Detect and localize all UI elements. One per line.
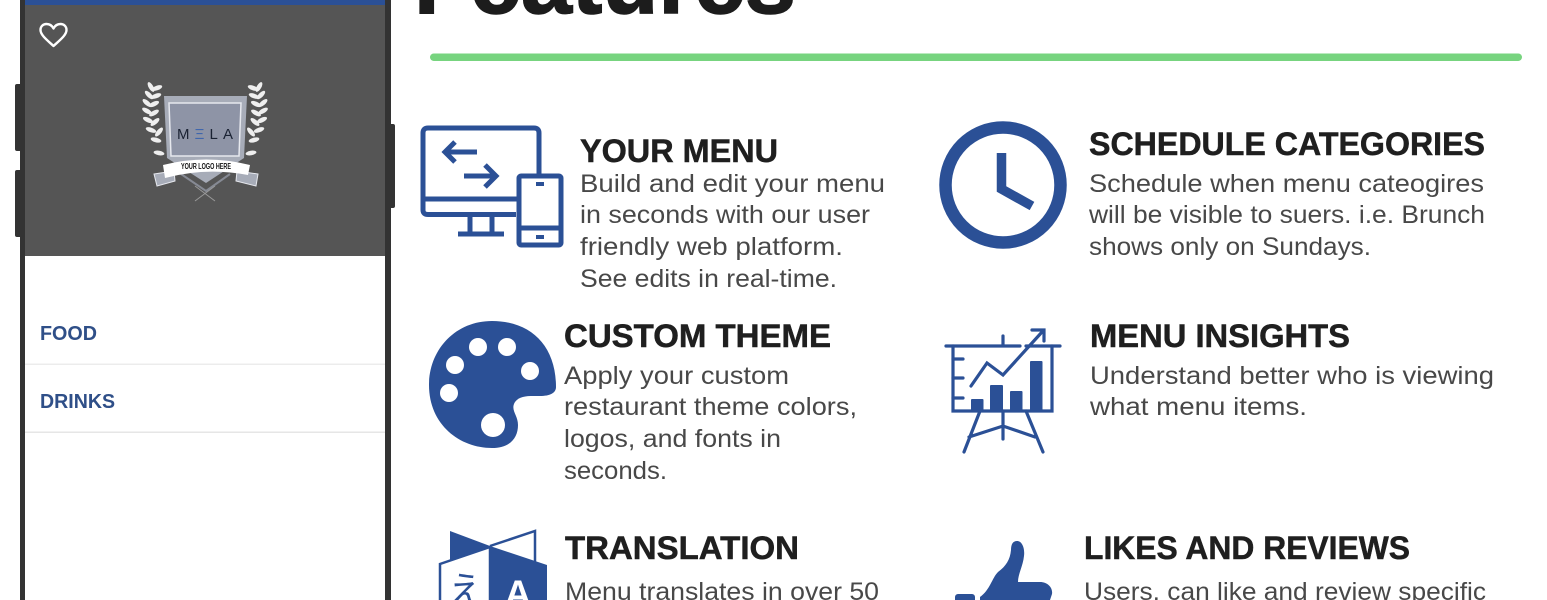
logo wordmark: M Ξ LA [177,126,233,143]
logo badge [141,81,269,201]
description: what menu items. [1089,393,1307,421]
description: friendly web platform. [580,233,843,261]
description: Apply your custom [564,362,789,390]
panel: phone mockup [15,0,395,600]
feature: your menu [423,128,885,293]
icon: translation book [440,531,547,600]
phone side buttons [15,84,395,237]
heading: CUSTOM THEME [564,318,831,354]
menu item: food: FOOD [40,323,97,345]
right laurel [245,81,269,156]
description: See edits in real-time. [580,265,837,293]
feature: custom theme [429,318,857,485]
description: Build and edit your menu [580,170,885,198]
menu item: drinks: DRINKS [40,391,115,413]
heading: YOUR MENU [580,133,778,169]
icon: clock [946,128,1060,242]
feature: schedule categories [946,126,1485,261]
title underline [430,54,1522,61]
heading: TRANSLATION [565,530,799,566]
ribbon text: YOUR LOGO HERE [181,162,231,171]
heading: SCHEDULE CATEGORIES [1089,126,1485,162]
heading: LIKES AND REVIEWS [1084,530,1410,566]
shield [164,96,247,183]
description: Schedule when menu cateogires [1089,170,1484,198]
restaurant header panel [25,5,385,256]
icon: palette [429,321,556,448]
description [564,362,857,485]
description: Understand better who is viewing [1090,362,1494,390]
description: restaurant theme colors, [564,393,857,421]
feature: likes and reviews [955,530,1486,600]
description [1089,362,1494,421]
description [580,170,885,293]
description: will be visible to suers. i.e. Brunch [1088,201,1485,229]
icon: thumbs up [955,541,1052,600]
left laurel [141,81,165,156]
feature: menu insights [946,318,1494,452]
phone frame [20,0,391,600]
feature: translation [440,530,879,600]
description: shows only on Sundays. [1089,233,1371,261]
description: in seconds with our user [580,201,870,229]
top blue bar [25,0,385,5]
icon: presentation chart [946,330,1060,452]
description: seconds. [564,457,667,485]
description: logos, and fonts in [564,425,781,453]
icon: devices [423,128,561,245]
icon: heart [40,24,66,46]
ribbon tails [154,171,258,186]
ribbon [163,160,250,178]
heading: MENU INSIGHTS [1090,318,1350,354]
description [1088,170,1485,261]
